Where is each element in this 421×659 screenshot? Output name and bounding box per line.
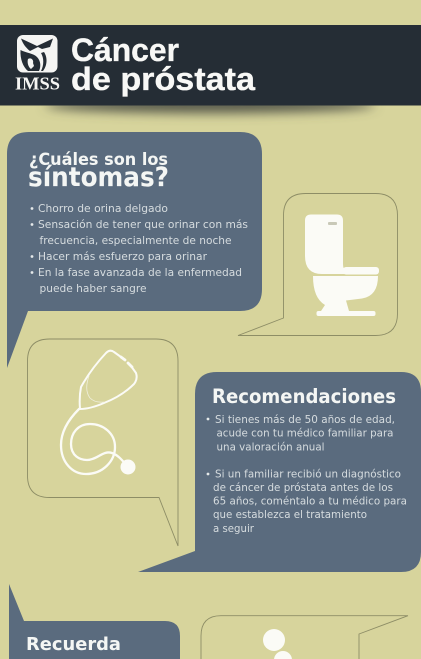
panel: recommendations xyxy=(138,372,421,572)
heading: symptoms: ¿Cuáles son los xyxy=(29,150,168,170)
heading: reminder: Recuerda xyxy=(26,634,121,655)
logo: IMSS xyxy=(15,35,60,94)
recommendations list: 65 años, coméntalo a tu médico para xyxy=(213,494,407,508)
heading: recommendations: Recomendaciones xyxy=(212,385,396,408)
recommendations list: que establezca el tratamiento xyxy=(213,508,367,521)
recommendations list: Si un familiar recibió un diagnóstico xyxy=(215,468,401,480)
symptoms list xyxy=(31,202,248,295)
heading: symptoms: síntomas? xyxy=(28,162,169,193)
icon: stethoscope xyxy=(61,351,137,474)
symptoms list: frecuencia, especialmente de noche xyxy=(40,234,232,247)
icon: person xyxy=(263,629,292,659)
header shadow xyxy=(45,97,375,113)
symptoms list: Chorro de orina delgado xyxy=(38,202,168,215)
heading: symptoms xyxy=(28,150,169,193)
panel: toilet outline bubble xyxy=(238,194,398,336)
header band xyxy=(0,25,421,106)
title xyxy=(71,32,255,97)
recommendations list: a seguir xyxy=(213,522,254,535)
title: Cáncer xyxy=(71,32,179,68)
symptoms list: Hacer más esfuerzo para orinar xyxy=(38,250,207,263)
recommendations list: acude con tu médico familiar para xyxy=(216,426,394,440)
recommendations list xyxy=(207,413,407,535)
symptoms list: Sensación de tener que orinar con más xyxy=(38,218,248,231)
logo wordmark: IMSS xyxy=(15,74,60,94)
title: de próstata xyxy=(71,61,255,97)
symptoms list: En la fase avanzada de la enfermedad xyxy=(38,266,242,279)
recommendations list: una valoración anual xyxy=(216,440,324,454)
panel: person outline bubble xyxy=(201,616,408,659)
recommendations list: de cáncer de próstata antes de los xyxy=(213,481,393,494)
panel: stethoscope outline bubble xyxy=(28,339,178,546)
panel: symptoms xyxy=(7,132,262,368)
recommendations list: Si tienes más de 50 años de edad, xyxy=(215,413,395,426)
symptoms list: puede haber sangre xyxy=(40,282,147,295)
panel: reminder xyxy=(9,584,180,659)
icon: toilet xyxy=(305,214,379,316)
